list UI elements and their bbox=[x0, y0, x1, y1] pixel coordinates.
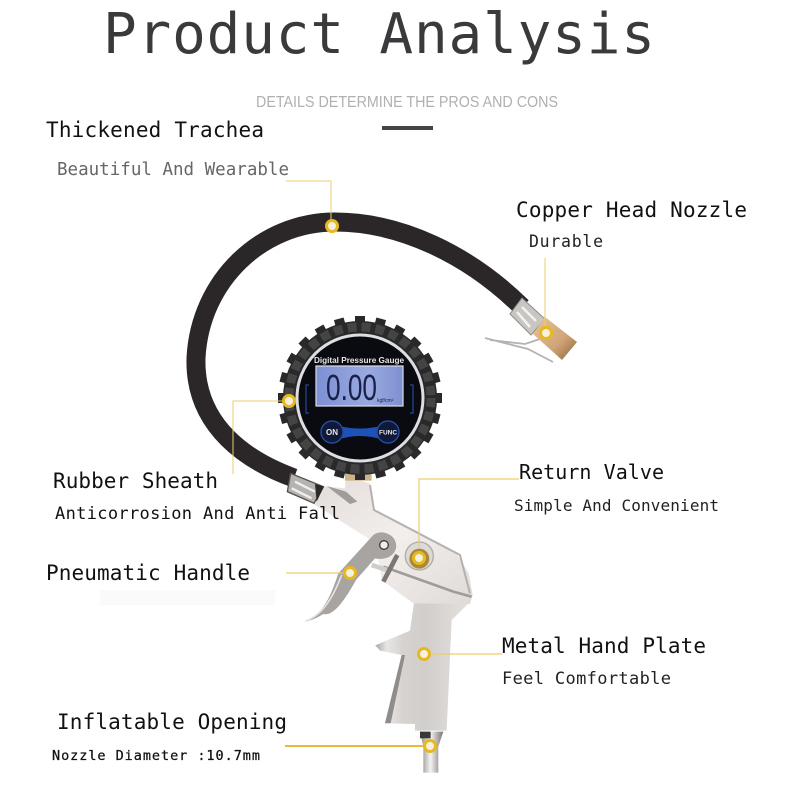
callout: rubber sheath bbox=[53, 396, 340, 524]
callout: thickened trachea: Thickened Trachea bbox=[46, 118, 264, 142]
callout: pneumatic handle bbox=[46, 561, 356, 585]
callout: return valve bbox=[414, 460, 719, 564]
gauge label: Digital Pressure Gauge bbox=[314, 356, 404, 365]
product: air gun body bbox=[287, 473, 473, 773]
gun tip bbox=[420, 732, 443, 773]
gun grip bbox=[375, 603, 469, 731]
product: copper head nozzle bbox=[485, 298, 577, 362]
product: digital gauge bbox=[278, 316, 442, 480]
callout: thickened trachea bbox=[46, 118, 338, 232]
callout: metal hand plate: Metal Hand Plate bbox=[502, 634, 706, 658]
gun trigger bbox=[305, 532, 396, 621]
title: Product Analysis bbox=[103, 2, 655, 67]
callout: inflatable opening bbox=[52, 710, 436, 764]
callout: copper head nozzle bbox=[516, 198, 747, 338]
gauge LCD: kgf/cm² bbox=[377, 398, 394, 404]
callout: rubber sheath: Rubber Sheath bbox=[53, 469, 218, 493]
callout: inflatable opening: Inflatable Opening bbox=[57, 710, 287, 734]
gauge buttons: ON bbox=[326, 428, 338, 437]
callout: return valve: Return Valve bbox=[519, 460, 664, 484]
gauge rubber boot bbox=[278, 316, 442, 480]
callout: copper head nozzle: Copper Head Nozzle bbox=[516, 198, 747, 222]
gauge buttons bbox=[321, 421, 399, 443]
gauge buttons: FUNC bbox=[379, 430, 397, 436]
callout: copper head nozzle: Durable bbox=[529, 232, 603, 251]
gauge LCD: 0.00 bbox=[326, 367, 377, 408]
callout: thickened trachea: Beautiful And Wearable bbox=[57, 160, 289, 180]
callout: metal hand plate: Feel Comfortable bbox=[502, 669, 671, 689]
callout: pneumatic handle: Pneumatic Handle bbox=[46, 561, 250, 585]
product: air hose bbox=[196, 222, 522, 478]
gauge face bbox=[297, 335, 423, 461]
subtitle: DETAILS DETERMINE THE PROS AND CONS bbox=[256, 94, 558, 111]
callout: metal hand plate bbox=[418, 634, 706, 689]
callout: inflatable opening: Nozzle Diameter :10.7mm bbox=[52, 748, 260, 764]
callout: return valve: Simple And Convenient bbox=[514, 496, 719, 515]
faint smudge bbox=[100, 590, 275, 605]
gun upper body bbox=[310, 476, 473, 604]
callout: rubber sheath: Anticorrosion And Anti Fall bbox=[55, 504, 340, 524]
gun return valve bbox=[405, 542, 433, 570]
subtitle accent bar bbox=[382, 126, 433, 130]
